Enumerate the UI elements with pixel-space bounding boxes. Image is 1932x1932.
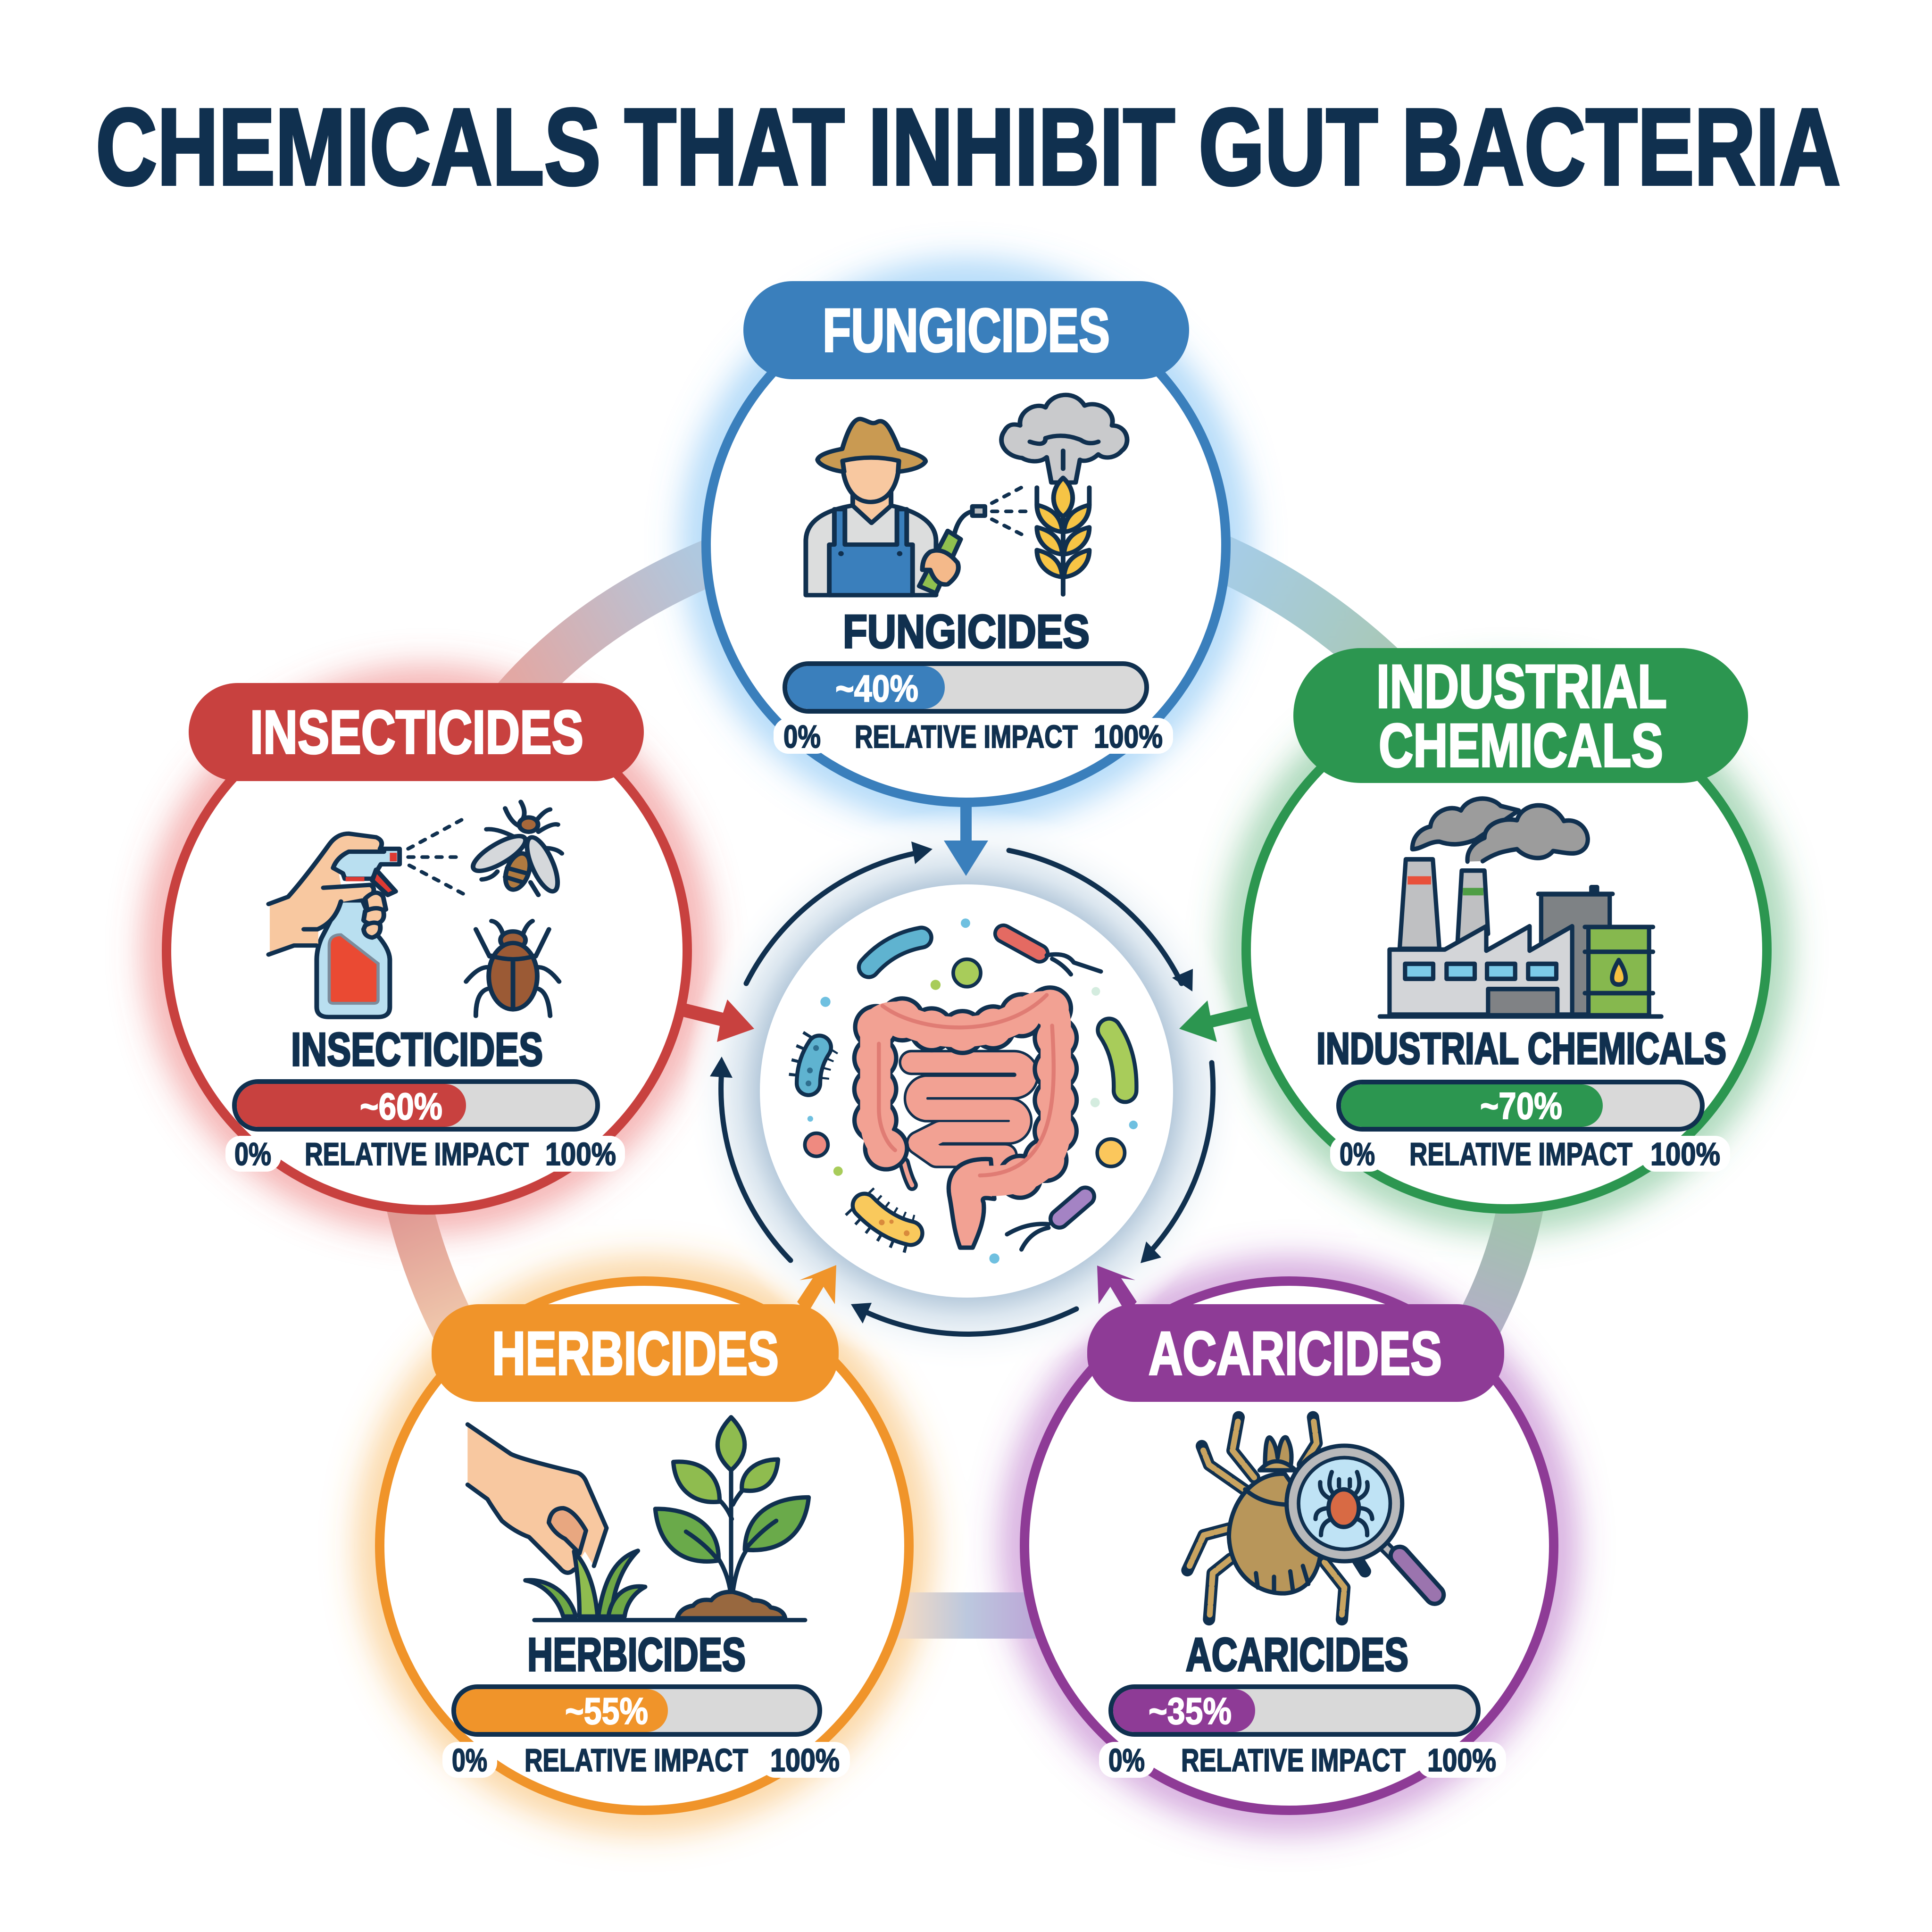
header pill bbox=[1087, 1304, 1504, 1402]
scale labels: 100% bbox=[770, 1742, 840, 1778]
scale labels: 100% bbox=[1427, 1742, 1496, 1778]
bacteria: red flagellate bbox=[1003, 933, 1101, 974]
scale labels: RELATIVE IMPACT bbox=[1409, 1136, 1632, 1172]
label: INSECTICIDES bbox=[291, 1023, 543, 1075]
arrow: insecticides bbox=[676, 999, 754, 1042]
circle bbox=[1024, 1281, 1554, 1810]
header text: INDUSTRIAL bbox=[1376, 652, 1667, 721]
label: ACARICIDES bbox=[1186, 1628, 1408, 1681]
scale labels: 100% bbox=[1650, 1136, 1720, 1172]
impact bar: 40% bbox=[785, 664, 1147, 711]
central halo bbox=[683, 808, 1249, 1374]
impact bar: 35%: ~35% bbox=[1149, 1690, 1232, 1732]
scale labels: 0% bbox=[1340, 1136, 1375, 1172]
scale labels bbox=[442, 1742, 850, 1778]
header text: CHEMICALS bbox=[1379, 711, 1663, 780]
impact bar: 60%: ~60% bbox=[360, 1085, 442, 1127]
central gut circle bbox=[760, 884, 1173, 1298]
large intestine bbox=[875, 995, 1056, 1181]
header pill bbox=[743, 281, 1189, 379]
scale labels: 0% bbox=[234, 1136, 271, 1172]
arrows from categories into gut bbox=[676, 802, 1257, 1314]
small intestine bbox=[911, 1063, 1026, 1156]
circle bbox=[167, 692, 687, 1210]
panel: acaricides bbox=[1024, 1281, 1554, 1810]
panel: insecticides bbox=[167, 683, 687, 1210]
header pill bbox=[432, 1304, 839, 1402]
arrow: acaricides bbox=[1097, 1266, 1137, 1314]
scale labels: RELATIVE IMPACT bbox=[1181, 1742, 1406, 1778]
scale labels: 100% bbox=[1094, 719, 1163, 755]
impact bar: 40%: ~40% bbox=[835, 667, 918, 709]
circle bbox=[706, 287, 1226, 802]
label: INDUSTRIAL CHEMICALS bbox=[1316, 1024, 1726, 1073]
rectum bbox=[949, 1159, 994, 1248]
header text: HERBICIDES bbox=[492, 1319, 779, 1388]
bacteria: blue spiky bbox=[806, 1042, 821, 1087]
label: FUNGICIDES bbox=[843, 605, 1090, 658]
appendix bbox=[904, 1163, 912, 1185]
scale labels: RELATIVE IMPACT bbox=[855, 719, 1078, 755]
circular arrows around the gut bbox=[710, 841, 1213, 1334]
panel: herbicides bbox=[380, 1281, 909, 1810]
scale labels: 0% bbox=[1108, 1742, 1145, 1778]
header pill bbox=[1293, 648, 1748, 783]
scale labels: RELATIVE IMPACT bbox=[305, 1136, 529, 1172]
scale labels: 0% bbox=[783, 719, 821, 755]
circle bbox=[380, 1281, 909, 1810]
panel: industrial chemicals bbox=[1246, 648, 1767, 1209]
impact bar: 70% bbox=[1339, 1082, 1702, 1129]
icon: tick and magnifying glass bbox=[1187, 1417, 1435, 1619]
impact bar: 35% bbox=[1111, 1687, 1478, 1734]
bacteria: yellow spiky bbox=[859, 1201, 915, 1236]
icon: gut and bacteria bbox=[805, 918, 1138, 1264]
scale labels: RELATIVE IMPACT bbox=[525, 1742, 748, 1778]
arrow: industrial chemicals bbox=[1179, 1000, 1257, 1042]
header text: INSECTICIDES bbox=[250, 698, 583, 766]
scale labels: 100% bbox=[545, 1136, 616, 1172]
circle bbox=[1246, 691, 1767, 1209]
header text bbox=[1376, 652, 1667, 780]
impact bar: 60% bbox=[234, 1082, 598, 1129]
header pill bbox=[189, 683, 644, 781]
bacteria: purple flagellate bbox=[1007, 1196, 1085, 1249]
scale labels: 0% bbox=[452, 1742, 487, 1778]
header text: FUNGICIDES bbox=[823, 296, 1110, 365]
arrow: herbicides bbox=[797, 1265, 836, 1314]
icon: factory and barrel bbox=[1380, 799, 1661, 1016]
bacteria: curved blue rod bbox=[869, 938, 922, 967]
scale labels bbox=[774, 718, 1173, 755]
scale labels bbox=[1099, 1742, 1506, 1778]
coloured glows behind the category circles bbox=[165, 281, 1769, 1812]
arrow: fungicides bbox=[944, 802, 988, 876]
impact bar: 55%: ~55% bbox=[565, 1690, 648, 1732]
panel: fungicides bbox=[706, 281, 1226, 802]
impact bar: 55% bbox=[454, 1687, 820, 1734]
header text: ACARICIDES bbox=[1149, 1319, 1442, 1388]
impact bar: 70%: ~70% bbox=[1480, 1085, 1562, 1127]
icon: hand pulling weed and plant bbox=[467, 1417, 809, 1620]
floating microbes bbox=[805, 918, 1138, 1264]
connecting ring bbox=[406, 552, 1524, 1616]
label: HERBICIDES bbox=[527, 1628, 746, 1681]
icon: spray bottle and insects bbox=[268, 802, 564, 1017]
bacteria: green rod bbox=[1109, 1030, 1125, 1091]
icon: farmer spraying wheat bbox=[806, 395, 1127, 595]
